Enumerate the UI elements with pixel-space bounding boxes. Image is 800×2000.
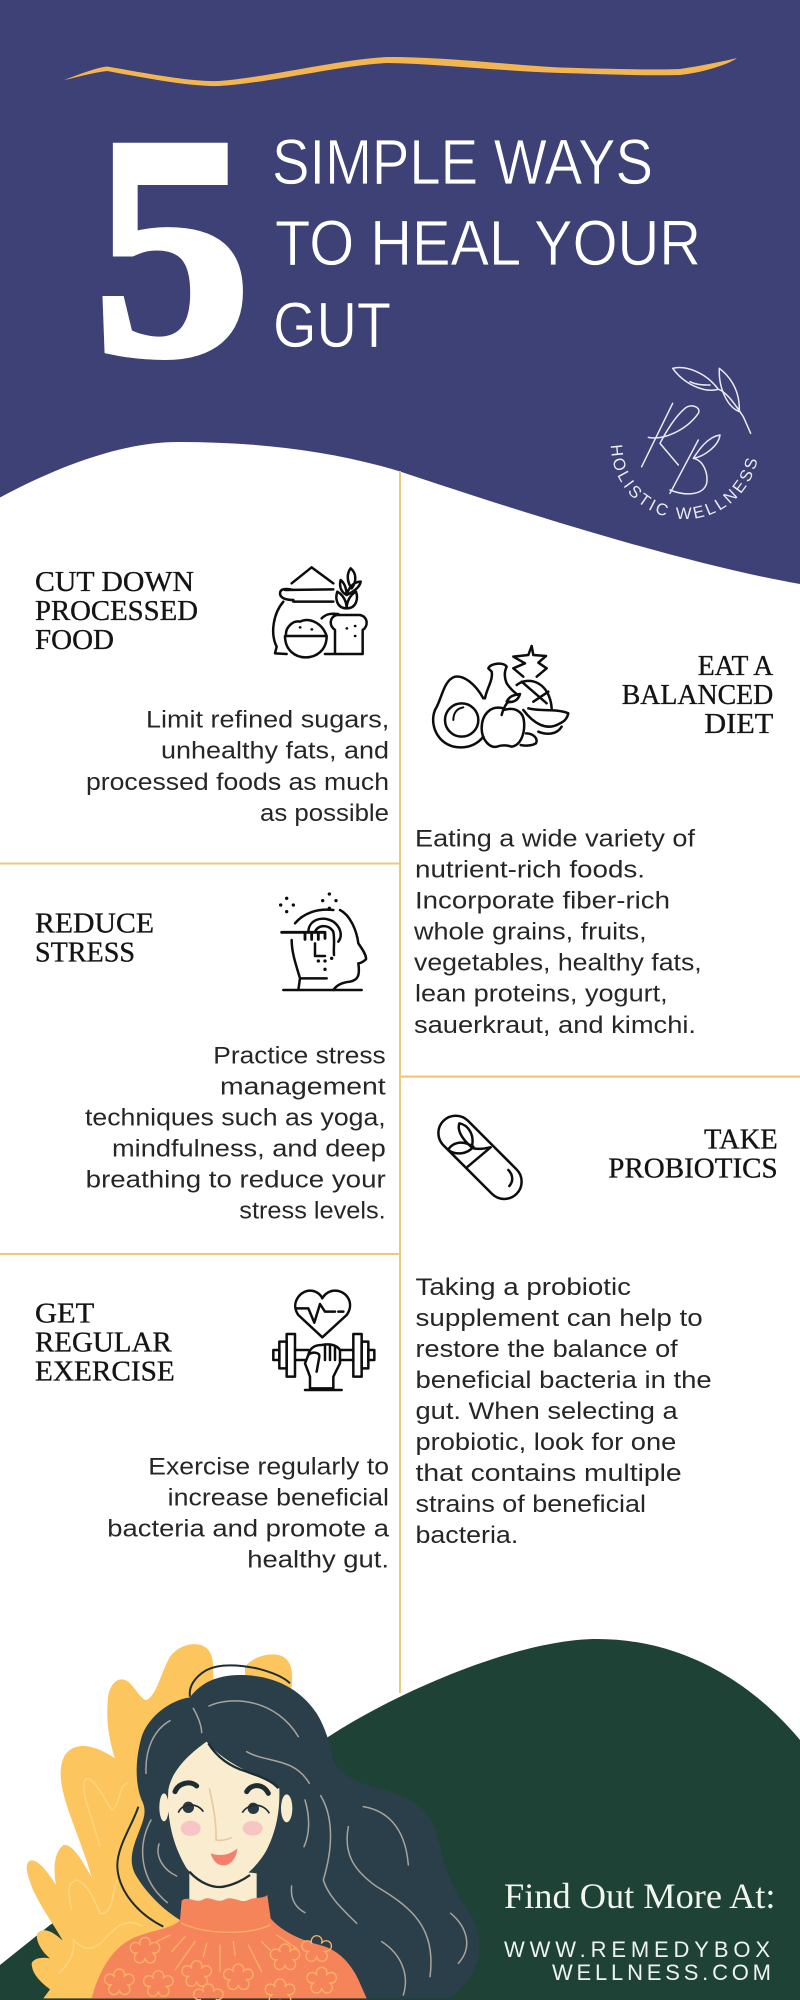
- text block: Limit refined sugars,: [146, 707, 389, 734]
- text block: processed foods as much: [86, 769, 389, 796]
- icon: head with key and ear: [281, 894, 366, 990]
- icon: capsule with leaf: [431, 1109, 529, 1206]
- text block: as possible: [260, 800, 389, 827]
- title: [272, 126, 701, 361]
- panel: reduce stress: [35, 894, 386, 1224]
- icon: fruit and avocado: [433, 646, 568, 747]
- text block: [413, 826, 702, 1039]
- heading: TAKE: [704, 1124, 778, 1156]
- heading: [608, 1124, 778, 1185]
- green hill footer: [0, 1639, 800, 2000]
- text block: techniques such as yoga,: [85, 1104, 386, 1131]
- title: SIMPLE WAYS: [272, 126, 653, 198]
- orange sweater: [92, 1895, 367, 2000]
- text block: that contains multiple: [416, 1460, 682, 1487]
- heading: REDUCE: [35, 908, 154, 940]
- text block: beneficial bacteria in the: [416, 1367, 712, 1394]
- text block: Eating a wide variety of: [415, 826, 695, 853]
- panel: cut down processed food: [35, 566, 389, 827]
- yellow divider lines: [0, 471, 800, 1693]
- text block: whole grains, fruits,: [413, 919, 647, 946]
- gold squiggle line: [64, 57, 737, 86]
- big numeral 5: 5: [94, 72, 250, 421]
- hair outline strands: [117, 1665, 290, 1927]
- illustration: smiling woman with long hair and yellow plant: [27, 1644, 479, 2000]
- logo: RB Holistic Wellness: HOLISTIC WELLNESS: [610, 445, 757, 519]
- heading: [35, 566, 198, 656]
- text block: restore the balance of: [416, 1336, 678, 1363]
- heading: [622, 650, 774, 740]
- text block: strains of beneficial: [416, 1491, 646, 1518]
- light hair strands: [143, 1701, 467, 1995]
- text block: [86, 707, 389, 827]
- heading: REGULAR: [35, 1327, 172, 1359]
- text block: Exercise regularly to: [148, 1453, 389, 1480]
- text block: [85, 1042, 386, 1224]
- text block: bacteria and promote a: [107, 1516, 390, 1543]
- title: GUT: [273, 289, 391, 361]
- icon: heart and dumbbell: [273, 1291, 374, 1390]
- text block: healthy gut.: [247, 1547, 389, 1574]
- heading: EXERCISE: [35, 1356, 175, 1388]
- panel: take probiotics: [416, 1109, 778, 1549]
- heading: FOOD: [35, 624, 114, 656]
- text block: gut. When selecting a: [416, 1398, 678, 1425]
- heading: GET: [35, 1298, 95, 1330]
- text block: mindfulness, and deep: [112, 1135, 386, 1162]
- text block: [107, 1453, 390, 1574]
- text block: probiotic, look for one: [416, 1429, 676, 1456]
- text block: nutrient-rich foods.: [415, 857, 645, 884]
- title: TO HEAL YOUR: [275, 207, 701, 279]
- text block: lean proteins, yogurt,: [415, 981, 668, 1008]
- logo: RB Holistic Wellness: [610, 366, 757, 519]
- footer call to action: [504, 1876, 776, 1985]
- text block: bacteria.: [416, 1522, 518, 1549]
- text block: Taking a probiotic: [416, 1274, 631, 1301]
- heading: [35, 908, 154, 969]
- text block: increase beneficial: [168, 1484, 389, 1512]
- heading: PROBIOTICS: [608, 1153, 778, 1185]
- heading: STRESS: [35, 937, 135, 969]
- heading: DIET: [704, 708, 774, 740]
- heading: [35, 1298, 175, 1388]
- text block: Incorporate fiber-rich: [415, 888, 670, 915]
- text block: Practice stress: [213, 1042, 386, 1069]
- heading: BALANCED: [622, 679, 773, 711]
- footer call to action: Find Out More At:: [504, 1876, 776, 1916]
- hair: [132, 1675, 479, 1998]
- text block: unhealthy fats, and: [161, 738, 389, 764]
- face: [168, 1742, 279, 1887]
- heading: CUT DOWN: [35, 566, 194, 598]
- text block: supplement can help to: [416, 1305, 703, 1332]
- neck and ears: [159, 1793, 292, 1907]
- heading: PROCESSED: [35, 595, 198, 627]
- text block: vegetables, healthy fats,: [414, 950, 702, 977]
- text block: breathing to reduce your: [86, 1166, 386, 1193]
- icon: grain sack, bowl and bread: [273, 567, 367, 657]
- footer call to action: WELLNESS.COM: [552, 1960, 771, 1985]
- text block: [416, 1274, 712, 1549]
- footer call to action: WWW.REMEDYBOX: [504, 1937, 770, 1962]
- text block: sauerkraut, and kimchi.: [414, 1012, 696, 1039]
- text block: management: [220, 1073, 386, 1100]
- yellow plant: [27, 1644, 292, 1998]
- panel: get regular exercise: [35, 1291, 390, 1574]
- panel: eat a balanced diet: [413, 646, 774, 1039]
- heading: EAT A: [698, 650, 773, 682]
- header wave background: [0, 0, 800, 584]
- text block: stress levels.: [239, 1197, 386, 1224]
